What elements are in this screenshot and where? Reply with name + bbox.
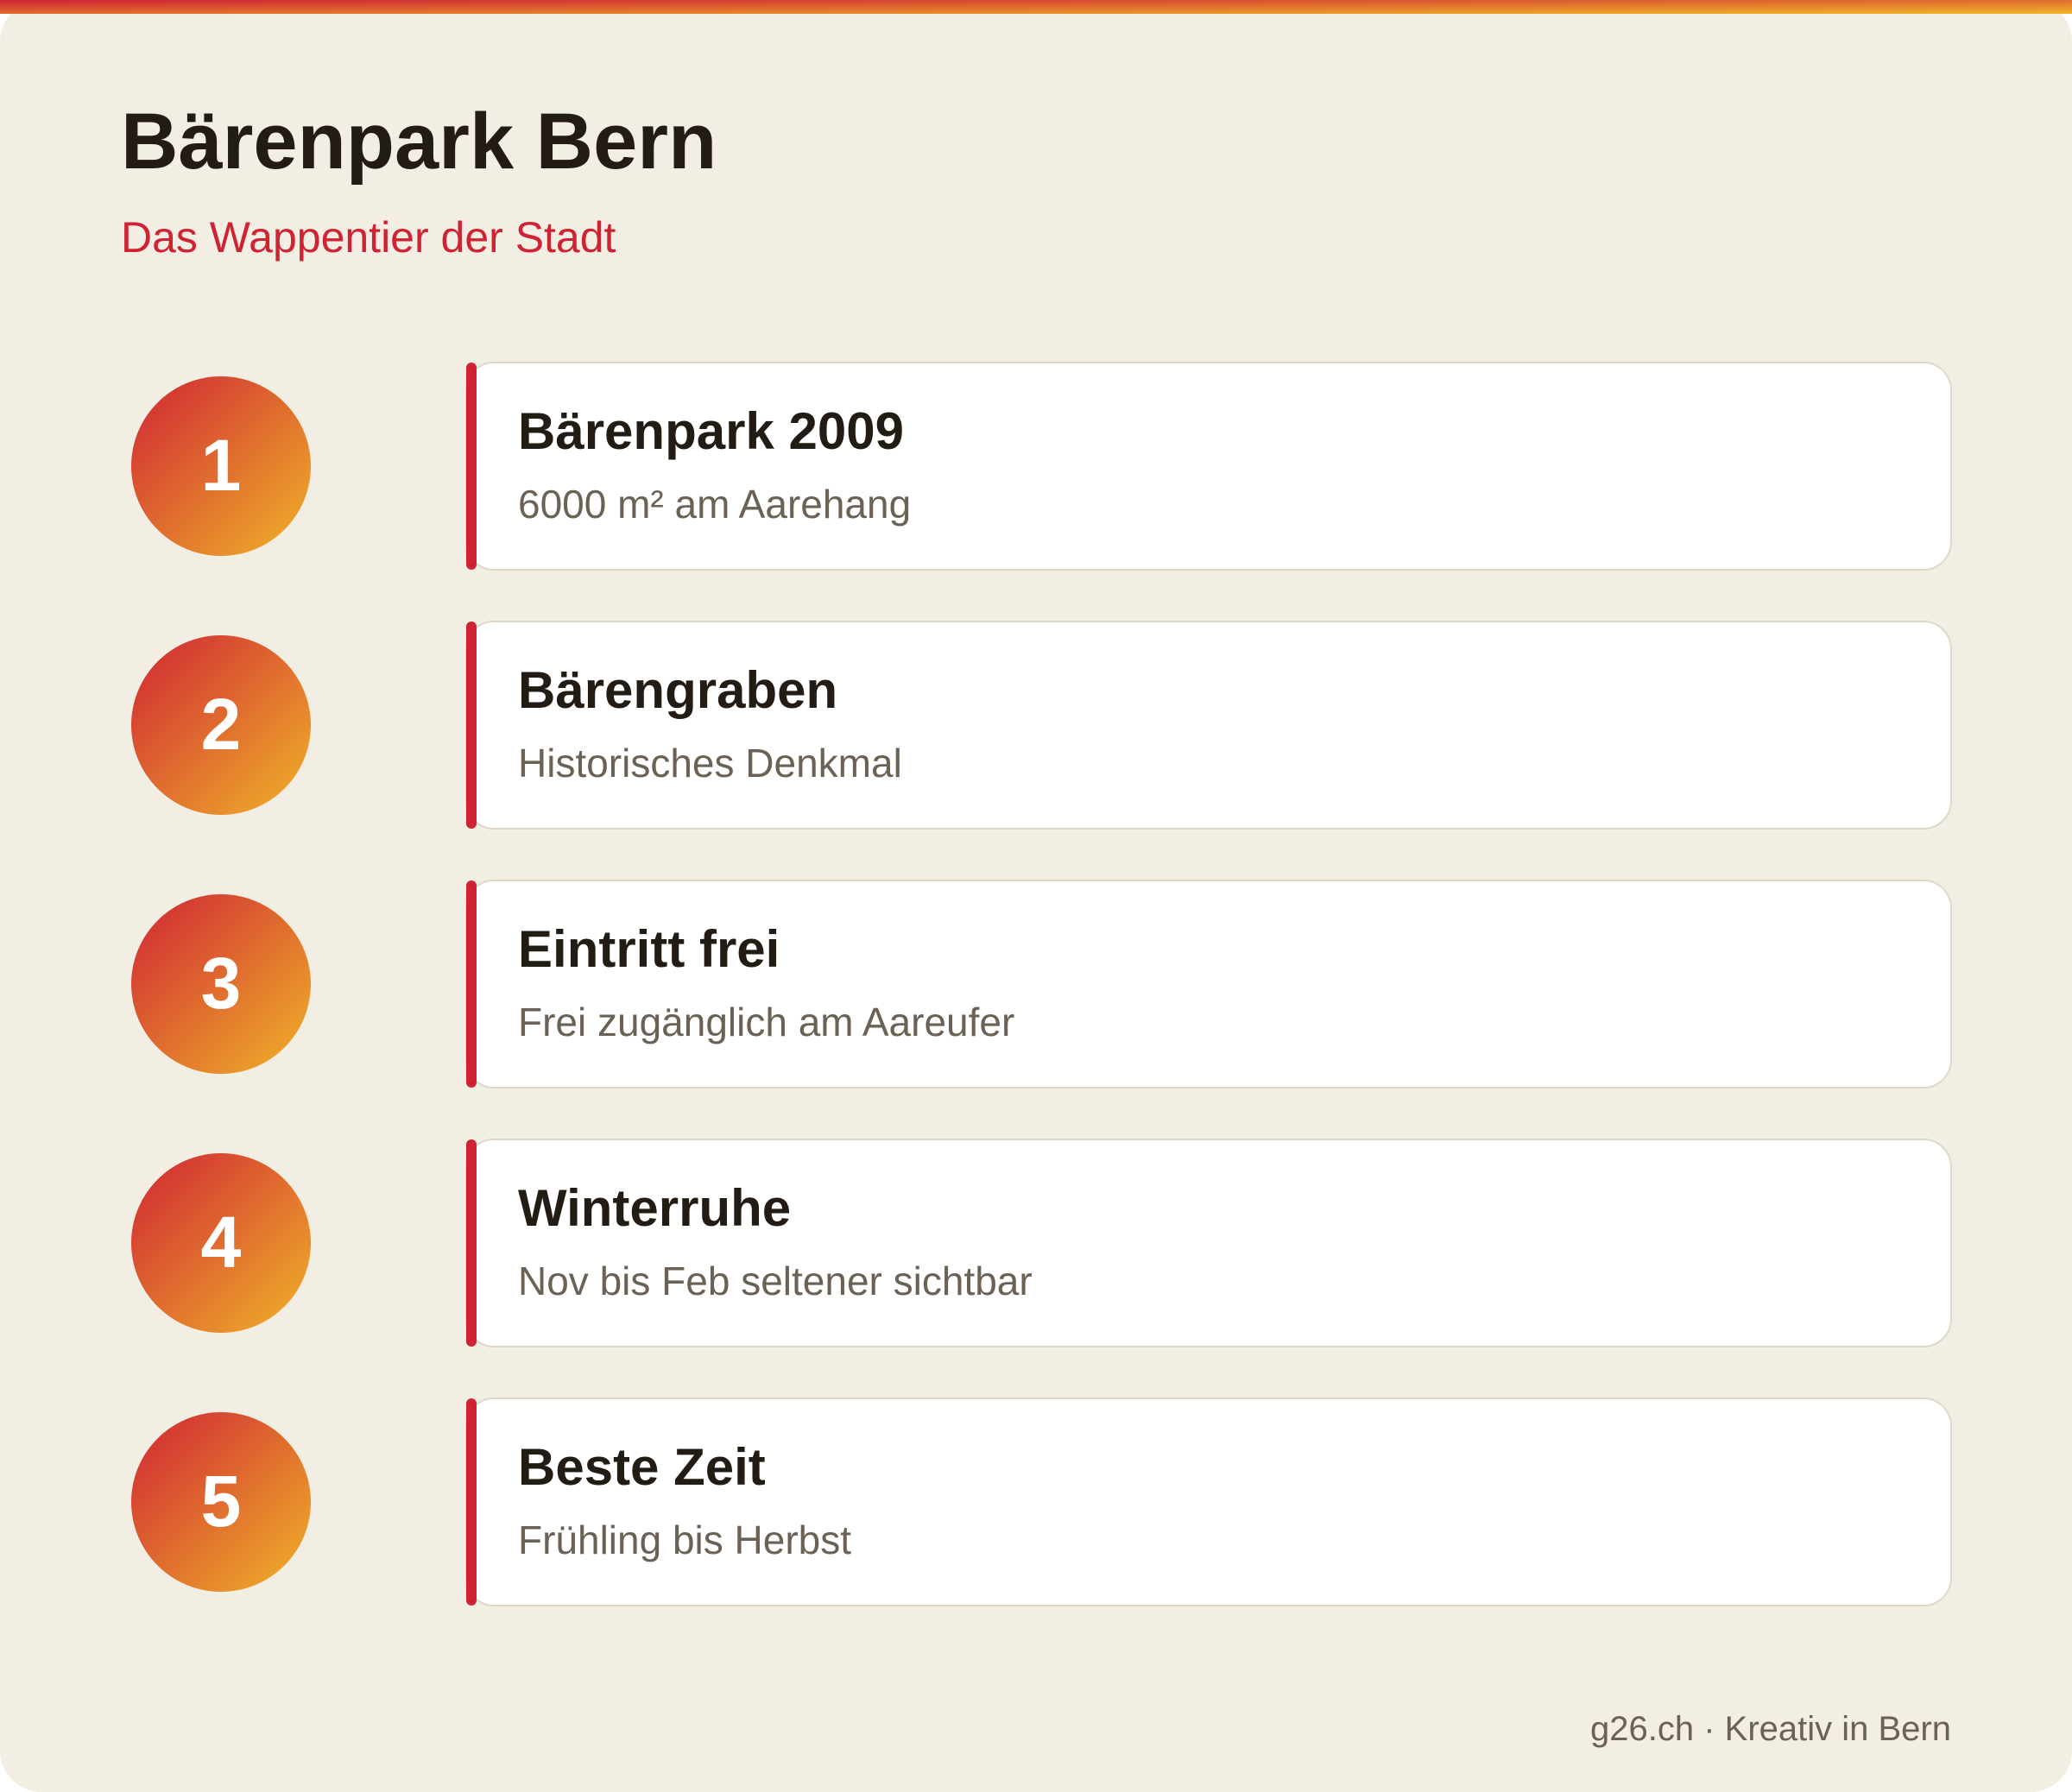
number badge 1 xyxy=(131,376,311,556)
card 4: Winterruhe xyxy=(518,1179,791,1237)
number badge 4 xyxy=(131,1153,311,1333)
item 4 xyxy=(131,1139,1951,1347)
card 3: Frei zugänglich am Aareufer xyxy=(518,1000,1014,1044)
item 5 xyxy=(131,1398,1951,1606)
title: Bärenpark Bern xyxy=(121,98,717,186)
footer: g26.ch · Kreativ in Bern xyxy=(1590,1710,1951,1748)
number badge 1: 1 xyxy=(201,425,241,506)
card 4 xyxy=(466,1139,1951,1347)
card 1: Bärenpark 2009 xyxy=(518,402,904,460)
card 4: Nov bis Feb seltener sichtbar xyxy=(518,1259,1033,1303)
card 1: 6000 m² am Aarehang xyxy=(518,482,911,527)
number badge 4: 4 xyxy=(201,1202,242,1283)
top gradient bar xyxy=(0,0,2072,14)
card 3: Eintritt frei xyxy=(518,920,780,978)
number badge 2 xyxy=(131,635,311,815)
card 5: Beste Zeit xyxy=(518,1438,766,1496)
subtitle: Das Wappentier der Stadt xyxy=(121,213,616,262)
item 1 xyxy=(131,363,1951,570)
item 3 xyxy=(131,880,1951,1088)
number badge 3: 3 xyxy=(201,943,241,1024)
number badge 3 xyxy=(131,894,311,1074)
item 2 xyxy=(131,622,1951,829)
number badge 5 xyxy=(131,1412,311,1592)
number badge 2: 2 xyxy=(201,684,241,765)
number badge 5: 5 xyxy=(201,1461,241,1542)
card 5: Frühling bis Herbst xyxy=(518,1518,851,1562)
card 2 xyxy=(466,622,1951,829)
card 2: Bärengraben xyxy=(518,661,837,719)
card 5 xyxy=(466,1398,1951,1606)
card 3 xyxy=(466,880,1951,1088)
card 2: Historisches Denkmal xyxy=(518,741,902,786)
card 1 xyxy=(466,363,1951,570)
